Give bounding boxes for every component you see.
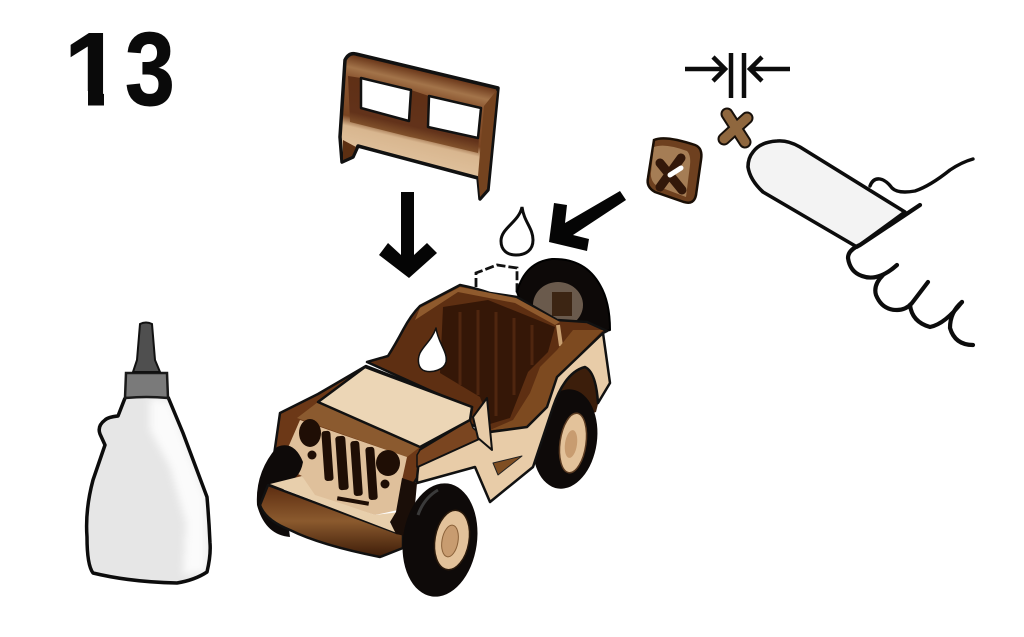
step number <box>64 11 175 128</box>
dashed peg outline <box>476 265 517 293</box>
front left wheel <box>257 445 303 537</box>
rear wheel <box>526 385 604 493</box>
windshield part <box>340 54 498 199</box>
rear deck strip <box>558 325 561 346</box>
spare wheel <box>517 259 610 335</box>
arrow: down to jeep <box>379 192 437 278</box>
windshield strut <box>473 398 492 450</box>
rear wheel arch <box>553 366 598 425</box>
bumper <box>260 485 403 557</box>
finger pressing <box>748 141 905 247</box>
front right wheel <box>395 478 485 602</box>
glue drop outline <box>501 207 533 255</box>
small cross peg <box>724 114 747 142</box>
glue drop on jeep <box>418 328 446 372</box>
side vent <box>493 456 522 475</box>
assembly step illustration <box>70 32 976 597</box>
arrow: toward jeep <box>549 191 626 251</box>
side coaming <box>490 330 603 430</box>
hood <box>318 367 472 447</box>
dark under front right <box>390 478 417 536</box>
seat back panel <box>440 300 555 424</box>
top edge highlight <box>415 287 560 325</box>
wooden jeep <box>257 259 610 602</box>
fender brown strip <box>417 420 483 467</box>
step number: 3 <box>125 11 175 128</box>
glue bottle <box>87 322 210 583</box>
cockpit brown shell <box>367 285 607 432</box>
hand outline <box>848 159 973 345</box>
hood lip <box>297 402 420 457</box>
seat ribs <box>460 310 532 416</box>
front body <box>270 366 472 505</box>
step number: 1 <box>64 12 122 128</box>
bumper cream top <box>270 476 400 533</box>
square peg block <box>648 138 701 203</box>
grille face <box>287 420 407 515</box>
body side panel <box>417 333 610 502</box>
headlights and slots <box>299 419 400 506</box>
gap dimension arrows <box>685 53 790 98</box>
